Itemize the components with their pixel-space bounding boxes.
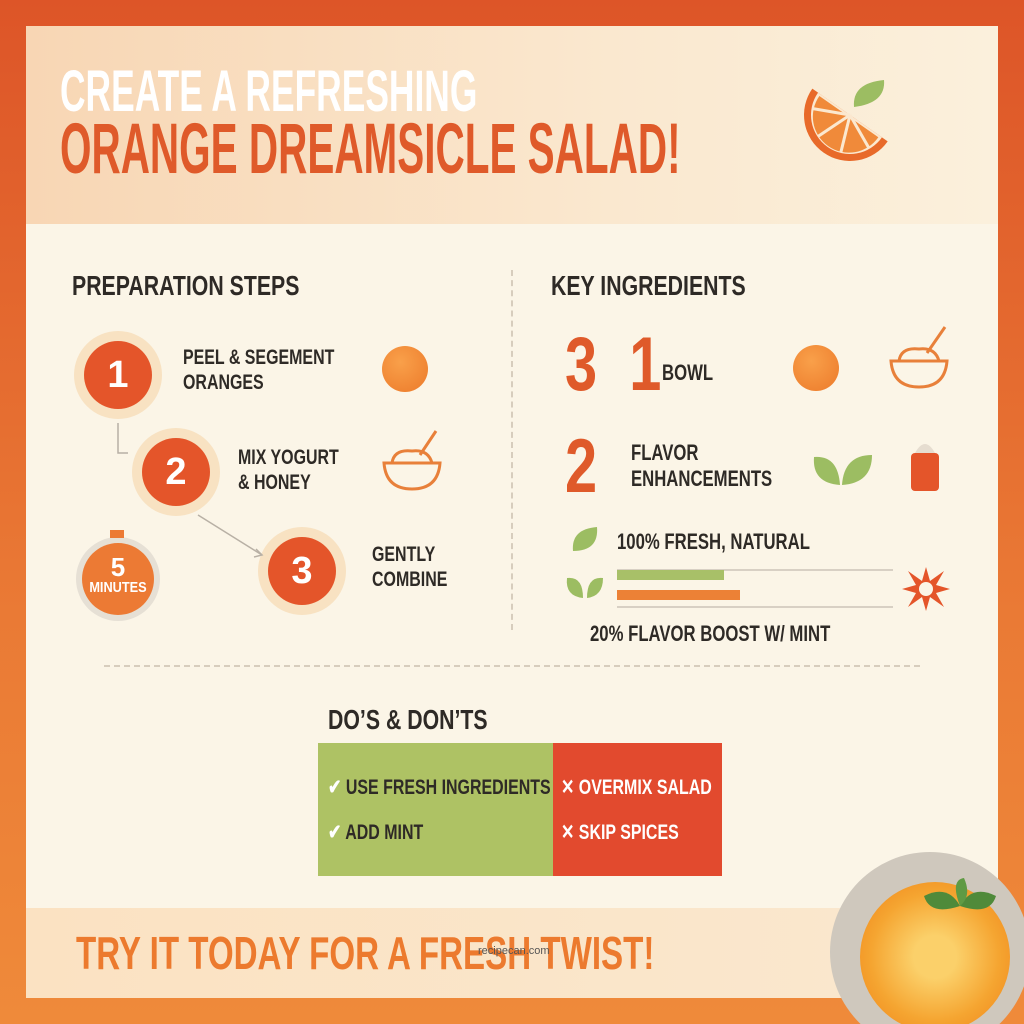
panel: preparation steps: COMBINE (372, 568, 447, 591)
panel: preparation steps: ORANGES (183, 371, 264, 394)
timer (76, 537, 160, 621)
panel: preparation steps: GENTLY (372, 543, 435, 566)
footer band (26, 908, 998, 998)
panel: preparation steps: PEEL & SEGEMENT (183, 346, 334, 369)
do's: ✔ USE FRESH INGREDIENTS (328, 776, 551, 799)
2 flavor: 2 (565, 424, 597, 509)
panel: preparation steps (72, 270, 447, 621)
step 2: 2 (165, 451, 187, 493)
step 3 (258, 527, 346, 615)
timer: MINUTES (89, 579, 147, 596)
don'ts: ✕ OVERMIX SALAD (561, 776, 712, 799)
panel: key ingredients (551, 270, 950, 646)
footer band: recipecan.com (478, 945, 550, 957)
divider vertical (511, 270, 513, 630)
header band (26, 26, 998, 224)
panel: key ingredients: ENHANCEMENTS (631, 466, 772, 491)
step 3: 3 (291, 550, 313, 592)
panel: key ingredients: 100% FRESH, NATURAL (617, 529, 810, 554)
stat bars (572, 527, 598, 551)
arrows (117, 423, 264, 558)
do's: ✔ ADD MINT (328, 821, 423, 844)
heading: DO’S & DON’TS (328, 704, 488, 735)
timer: 5 (111, 552, 125, 582)
panel: preparation steps: & HONEY (238, 471, 311, 494)
heading: PREPARATION STEPS (72, 270, 299, 301)
image: orange plate (830, 852, 1024, 1024)
don'ts: ✕ SKIP SPICES (561, 821, 679, 844)
title: CREATE A REFRESHING (60, 59, 477, 124)
step 1: 1 (107, 354, 129, 396)
divider horizontal (104, 665, 920, 667)
heading: KEY INGREDIENTS (551, 270, 746, 301)
panel: do's and don'ts (318, 704, 722, 876)
panel: preparation steps: MIX YOGURT (238, 446, 339, 469)
header band: ORANGE DREAMSICLE SALAD! (60, 110, 681, 189)
panel: key ingredients: 20% FLAVOR BOOST W/ MINT (590, 621, 830, 646)
panel: key ingredients: BOWL (662, 360, 713, 385)
step 2 (132, 428, 220, 516)
step 1 (74, 331, 162, 419)
icon: bowl (382, 430, 442, 490)
footer text: TRY IT TODAY FOR A FRESH TWIST! (76, 927, 654, 979)
icon: orange (382, 346, 428, 392)
don'ts (553, 743, 722, 876)
icon: orange slice (804, 80, 888, 161)
3 1 bowl: 3 1 (565, 322, 661, 407)
panel: key ingredients: FLAVOR (631, 440, 698, 465)
do's (318, 743, 553, 876)
